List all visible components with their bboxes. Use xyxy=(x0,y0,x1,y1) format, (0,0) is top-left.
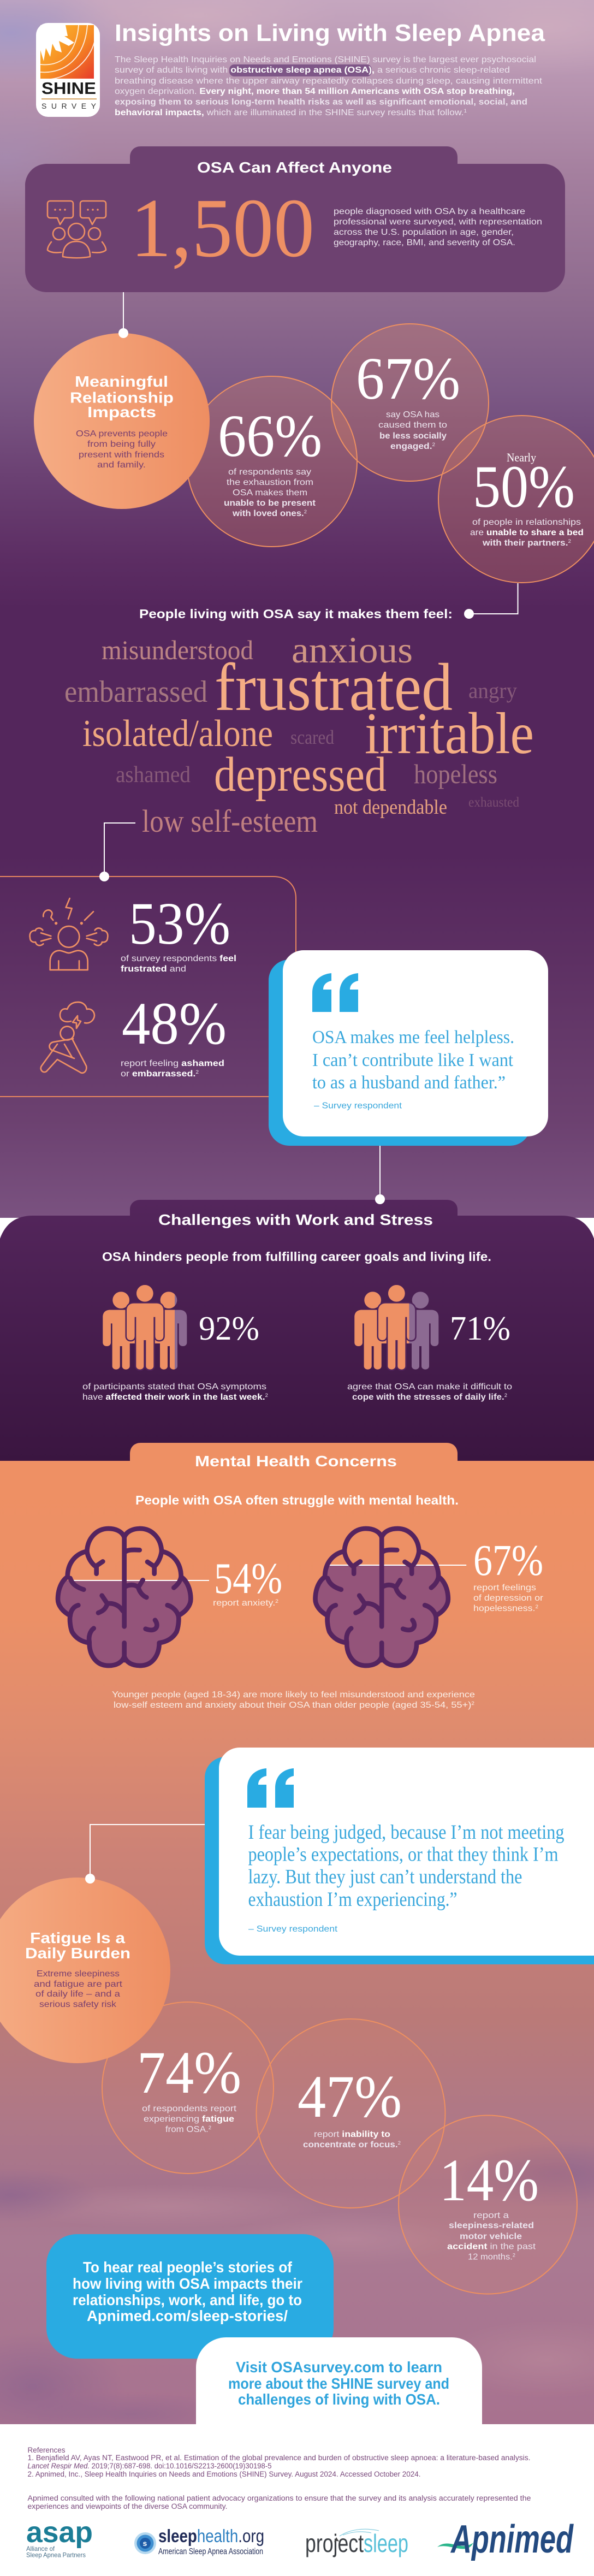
circle stat: 74% xyxy=(102,2002,274,2174)
stat text: agree that OSA can make it difficult to xyxy=(347,1382,512,1391)
word cloud: angry xyxy=(468,678,517,703)
word cloud: frustrated xyxy=(215,650,453,725)
circle stat: 14%: accident in the past xyxy=(447,2242,536,2251)
references: 2. Apnimed, Inc., Sleep Health Inquiries on Needs and Emotions (SHINE) Survey. August 2024. Accessed October 2024. xyxy=(27,2470,420,2478)
attribution: – Survey respondent xyxy=(248,1924,338,1934)
advocacy statement xyxy=(27,2494,531,2510)
description: people diagnosed with OSA by a healthcare xyxy=(334,207,525,216)
logo: sleephealth.org: s xyxy=(143,2539,147,2548)
callout: real people's stories: how living with OSA impacts their xyxy=(73,2275,302,2292)
description: geography, race, BMI, and severity of OSA. xyxy=(334,238,515,247)
icon: quotation mark xyxy=(312,973,358,1012)
panel: Mental Health Concerns xyxy=(58,1443,544,1710)
connector: panel to relationship impacts xyxy=(123,292,124,333)
stat text: frustrated and xyxy=(121,964,186,974)
quote text: lazy. But they just can’t understand the xyxy=(248,1866,522,1888)
callout: Visit OSAsurvey.com: challenges of living with OSA. xyxy=(238,2391,440,2408)
note: younger people: Younger people (aged 18-34) are more likely to feel misunderstood and experience xyxy=(112,1690,475,1699)
panel: frustrated and ashamed stats xyxy=(0,823,296,1097)
references xyxy=(27,2446,531,2478)
subheading: OSA hinders people from fulfilling career goals and living life. xyxy=(102,1249,491,1264)
word cloud: ashamed xyxy=(116,762,191,787)
quote text: OSA makes me feel helpless. xyxy=(312,1027,514,1047)
word cloud: exhausted xyxy=(468,795,519,810)
circle stat: 14%: 2 xyxy=(513,2252,515,2258)
connector: quote to challenges panel xyxy=(379,1146,381,1199)
note: younger people: 2 xyxy=(471,1701,474,1706)
logo: sleephealth.org: American Sleep Apnea Association xyxy=(158,2547,263,2556)
description xyxy=(334,207,542,247)
word cloud: not dependable xyxy=(334,796,447,819)
stat text: of depression or xyxy=(473,1594,544,1603)
stat 48%: 48% xyxy=(122,990,227,1057)
circle stat: 47%: report inability to xyxy=(314,2130,390,2139)
icon: person under storm cloud xyxy=(41,1002,94,1073)
quote text: people’s expectations, or that they think I’m xyxy=(248,1844,559,1866)
logo: project sleep: project xyxy=(305,2529,364,2557)
quote text xyxy=(312,1027,514,1093)
subheading: People with OSA often struggle with mental health. xyxy=(135,1493,459,1507)
circle heading: Meaningful Relationship Impacts: present with friends xyxy=(79,450,164,460)
circle stat: 50%: Nearly xyxy=(507,451,536,464)
references: 1. Benjafield AV, Ayas NT, Eastwood PR, et al. Estimation of the global prevalence and burden of obstructive sleep apnoea: a literature-based analysis. xyxy=(27,2454,531,2462)
circle heading: Fatigue Is a Daily Burden: and fatigue are part xyxy=(34,1980,123,1989)
circle heading: Fatigue Is a Daily Burden: Extreme sleepiness xyxy=(37,1969,120,1979)
icon: quotation mark xyxy=(247,1768,294,1808)
intro text block: exposing them to serious long-term health risks as well as significant emotional, social, and xyxy=(115,97,527,107)
stat text: of survey respondents feel xyxy=(121,954,236,963)
note: younger people xyxy=(112,1690,475,1710)
icon: brain 54% xyxy=(58,1529,209,1666)
stat 92%: 92% xyxy=(199,1310,259,1347)
circle heading: Fatigue Is a Daily Burden: of daily life – and a xyxy=(35,1989,120,1999)
circle stat: 67% xyxy=(331,324,489,481)
icon: people 92% xyxy=(103,1285,187,1370)
stat text: report feelings xyxy=(473,1583,536,1592)
advocacy statement: experiences and viewpoints of the diverse OSA community. xyxy=(27,2502,227,2510)
logo: sleephealth.org xyxy=(134,2526,264,2556)
icon: people 71% xyxy=(354,1285,438,1370)
word cloud: depressed xyxy=(214,748,387,802)
circle stat: 66% xyxy=(187,376,357,547)
circle heading: Meaningful Relationship Impacts: and family. xyxy=(97,460,146,470)
circle stat: 66%: with loved ones. xyxy=(233,509,300,518)
circle stat: 67%: 2 xyxy=(432,442,435,447)
references: Lancet Respir Med. 2019;7(8):687-698. doi:10.1016/S2213-2600(19)30198-5 xyxy=(27,2462,271,2470)
circle heading: Fatigue Is a Daily Burden xyxy=(0,1874,170,2063)
circle stat: 14%: report a xyxy=(473,2211,509,2220)
quote text: to as a husband and father.” xyxy=(312,1073,506,1093)
footer background xyxy=(0,2424,594,2576)
circle heading: Meaningful Relationship Impacts: Meaningful xyxy=(75,373,168,390)
circle stat: 50%: with their partners. xyxy=(483,538,561,548)
circle heading: Meaningful Relationship Impacts xyxy=(34,328,210,509)
circle stat: 14%: motor vehicle xyxy=(460,2232,522,2241)
heading: OSA Can Affect Anyone xyxy=(197,159,392,176)
circle stat: 47%: 47% xyxy=(298,2063,402,2130)
circle stat: 74%: from OSA. xyxy=(165,2125,206,2134)
intro text block: The Sleep Health Inquiries on Needs and Emotions (SHINE) survey is the largest ever psychosocial xyxy=(115,55,536,64)
circle stat: 50%: 2 xyxy=(568,538,571,544)
circle heading: Meaningful Relationship Impacts: Impacts xyxy=(87,404,156,421)
logo: project sleep: sleep xyxy=(364,2529,408,2557)
circle stat: 66%: the exhaustion from xyxy=(227,478,313,487)
references: References xyxy=(27,2446,66,2454)
heading: Mental Health Concerns xyxy=(195,1453,397,1470)
logo: asap: Sleep Apnea Partners xyxy=(26,2551,86,2559)
circle stat: 74%: of respondents report xyxy=(142,2104,237,2113)
stat text xyxy=(121,1059,224,1079)
circle stat: 74%: 2 xyxy=(209,2125,211,2130)
intro text block: survey of adults living with obstructive sleep apnea (OSA), a serious chronic sleep-related xyxy=(115,66,510,75)
header: SHINE logo: SURVEY xyxy=(41,102,97,110)
callout: real people's stories: relationships, work, and life, go to xyxy=(73,2291,302,2308)
stat text xyxy=(347,1382,512,1402)
word cloud: irritable xyxy=(365,701,534,766)
stat text: report anxiety. xyxy=(213,1598,268,1608)
stat 54%: 54% xyxy=(214,1555,282,1603)
circle stat: 14% xyxy=(399,2116,577,2294)
circle heading: Fatigue Is a Daily Burden: Daily Burden xyxy=(25,1945,130,1962)
heading: Challenges with Work and Stress xyxy=(158,1211,433,1228)
stat text: cope with the stresses of daily life. xyxy=(352,1393,496,1402)
quote text xyxy=(248,1821,565,1911)
stat 71%: 71% xyxy=(450,1310,510,1347)
intro text block: breathing disease where the upper airway repeatedly collapses during sleep, causing intermittent xyxy=(115,76,543,86)
circle heading: Fatigue Is a Daily Burden: Fatigue Is a xyxy=(30,1929,125,1946)
intro text block xyxy=(115,55,543,117)
circle stat: 47%: 2 xyxy=(398,2140,401,2146)
stat text xyxy=(82,1382,268,1402)
callout: real people's stories: To hear real people’s stories of xyxy=(83,2259,293,2276)
circle stat: 66%: 2 xyxy=(304,509,307,514)
circle heading: Meaningful Relationship Impacts: from being fully xyxy=(87,440,156,449)
icon: brain 67% xyxy=(315,1529,466,1666)
stat text xyxy=(473,1583,544,1613)
stat text: or embarrassed. xyxy=(121,1069,189,1079)
word cloud: embarrassed xyxy=(64,675,207,709)
word cloud xyxy=(64,629,534,839)
circle stat: 67%: engaged. xyxy=(390,442,429,451)
big number 1,500: 1,500 xyxy=(130,182,314,275)
circle stat: 14%: sleepiness-related xyxy=(449,2221,534,2230)
word cloud: low self-esteem xyxy=(142,803,318,839)
description: across the U.S. population in age, gender, xyxy=(334,228,514,237)
connector: quote to fatigue circle xyxy=(90,1825,205,1879)
circle stat: 66%: OSA makes them xyxy=(233,488,307,498)
circle stat: 74%: 74% xyxy=(137,2039,241,2106)
heading: word cloud: People living with OSA say it makes them feel: xyxy=(139,607,453,621)
word cloud: hopeless xyxy=(414,759,497,789)
stat text xyxy=(121,954,236,974)
intro text block: behavioral impacts, which are illuminated in the SHINE survey results that follow. xyxy=(115,108,441,117)
note: younger people: low-self esteem and anxiety about their OSA than older people (aged 35-54, 55+) xyxy=(114,1701,427,1710)
stat 53%: 53% xyxy=(129,890,230,957)
circle stat: 14%: 12 months. xyxy=(468,2252,511,2262)
circle stat: 47%: concentrate or focus. xyxy=(303,2140,392,2149)
circle stat: 66%: 66% xyxy=(218,402,322,469)
panel: OSA Can Affect Anyone xyxy=(25,146,565,292)
callout: Visit OSAsurvey.com: Visit OSAsurvey.com to learn xyxy=(236,2359,442,2376)
stat text: of participants stated that OSA symptoms xyxy=(82,1382,266,1391)
word cloud: misunderstood xyxy=(102,635,253,665)
circle heading: Meaningful Relationship Impacts: Relationship xyxy=(70,389,174,406)
header: SHINE logo xyxy=(36,23,100,117)
intro text block: 1 xyxy=(464,108,467,114)
panel: Challenges with Work and Stress xyxy=(0,1194,594,1461)
header: SHINE logo: SHINE xyxy=(41,79,96,98)
stat text: 2 xyxy=(504,1393,507,1398)
circle stat: 67%: say OSA has xyxy=(386,410,439,419)
stat text: report feeling ashamed xyxy=(121,1059,224,1068)
circle heading: Meaningful Relationship Impacts: OSA prevents people xyxy=(76,429,168,439)
logo: asap: asap xyxy=(26,2516,93,2549)
stat 67%: 67% xyxy=(473,1537,543,1585)
callout: Visit OSAsurvey.com: more about the SHINE survey and xyxy=(228,2375,449,2392)
advocacy statement: Apnimed consulted with the following national patient advocacy organizations to ensure that the survey and its analysis accurately represented the xyxy=(27,2494,531,2502)
circle stat: 67%: be less socially xyxy=(379,431,447,441)
quote text: exhaustion I’m experiencing.” xyxy=(248,1888,458,1911)
icon: frustrated person xyxy=(30,898,108,970)
circle heading: Fatigue Is a Daily Burden: serious safety risk xyxy=(39,2000,117,2009)
stat text: 2 xyxy=(535,1604,538,1609)
stat text: have affected their work in the last week. xyxy=(82,1393,253,1402)
callout: Visit OSAsurvey.com xyxy=(196,2337,482,2427)
circle stat: 47% xyxy=(257,2019,445,2208)
logo: asap: Alliance of xyxy=(26,2545,55,2553)
stat text: 2 xyxy=(275,1598,278,1604)
word cloud: scared xyxy=(290,726,334,748)
word cloud: anxious xyxy=(292,629,413,671)
circle stat: 74%: experiencing fatigue xyxy=(144,2115,234,2124)
icon: group of people talking xyxy=(47,201,106,258)
stat text: 2 xyxy=(265,1393,268,1398)
circle stat: 50%: of people in relationships xyxy=(472,518,581,527)
word cloud: isolated/alone xyxy=(82,713,273,755)
circle stat: 50%: 50% xyxy=(473,453,575,520)
circle stat: 66%: of respondents say xyxy=(228,467,311,477)
callout: real people's stories xyxy=(46,2234,334,2359)
quote text: I can’t contribute like I want xyxy=(312,1050,514,1070)
circle stat: 67%: 67% xyxy=(356,345,460,412)
circle stat: 50%: are unable to share a bed xyxy=(470,528,584,537)
circle stat: 66%: unable to be present xyxy=(224,499,316,508)
circle stat: 50% xyxy=(438,416,594,583)
circle stat: 67%: caused them to xyxy=(378,421,447,430)
intro text block: oxygen deprivation. Every night, more than 54 million Americans with OSA stop breathing, xyxy=(115,87,515,96)
logo: sleephealth.org: sleephealth.org xyxy=(158,2526,264,2546)
title: Insights on Living with Sleep Apnea xyxy=(115,20,545,46)
description: professional were surveyed, with representation xyxy=(334,217,542,227)
quote card: helpless xyxy=(269,950,548,1146)
callout: real people's stories: Apnimed.com/sleep-stories/ xyxy=(87,2307,288,2324)
attribution: – Survey respondent xyxy=(314,1101,402,1111)
stat text: 2 xyxy=(195,1069,199,1075)
quote card: fear being judged xyxy=(205,1748,594,1964)
stat text: hopelessness. xyxy=(473,1604,529,1613)
connector: 50% circle to word cloud heading xyxy=(464,583,518,619)
circle stat: 14%: 14% xyxy=(439,2147,539,2213)
